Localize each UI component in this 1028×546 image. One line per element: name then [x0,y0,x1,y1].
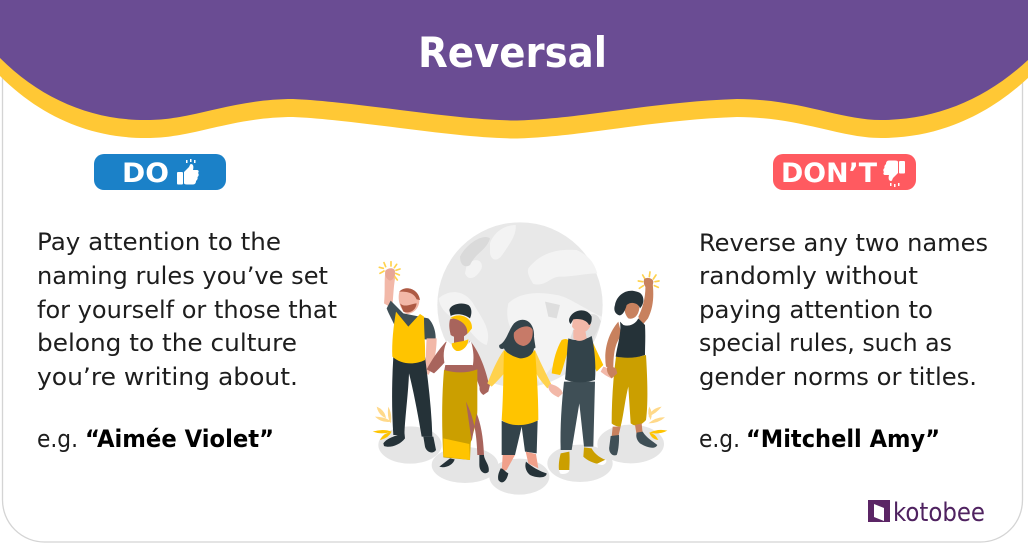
text block: don't example: e.g. [699,425,740,453]
text block: don't example: “Mitchell Amy” [746,425,940,453]
badge: don't: DON’T [781,158,878,189]
icon: book [868,500,890,522]
fists [385,268,653,288]
icon: thumbs up [177,159,199,184]
text block: don't advice: paying attention to [699,296,933,324]
badge: do: DO [122,158,169,189]
badge: do [94,154,226,190]
person 1: man raising fist [383,269,437,452]
text block: do advice: belong to the culture [37,329,297,357]
header wave: yellow band [0,0,1028,138]
badge: don't [773,154,916,190]
text block: don't advice: special rules, such as [699,329,952,357]
text block: do advice: naming rules you’ve set [37,262,328,290]
icon: thumbs down [883,160,905,187]
text block: don't advice [699,229,988,391]
person 4: boy in vest [552,310,617,474]
text block: do advice: you’re writing about. [37,363,298,391]
person 5: woman raising fist [605,280,657,455]
illustration: people and globe [373,222,667,495]
person 2: woman in skirt [427,303,489,473]
title: Reversal [418,28,607,77]
text block: do advice: Pay attention to the [37,228,281,256]
text block: do example: e.g. [37,425,78,453]
ground shadows [378,425,664,495]
person 3: woman in yellow dress [479,320,563,482]
sparkles [379,262,659,288]
logo: kotobee: kotobee [893,498,985,528]
text block: don't advice: Reverse any two names [699,229,988,257]
text block: do advice [37,228,337,391]
text block: don't advice: gender norms or titles. [699,363,977,391]
text block: do advice: for yourself or those that [37,296,337,324]
text block: do example: “Aimée Violet” [85,425,274,453]
text block: don't advice: randomly without [699,262,918,290]
header wave: purple band [0,0,1028,120]
leaves [375,407,665,423]
globe [437,222,603,388]
